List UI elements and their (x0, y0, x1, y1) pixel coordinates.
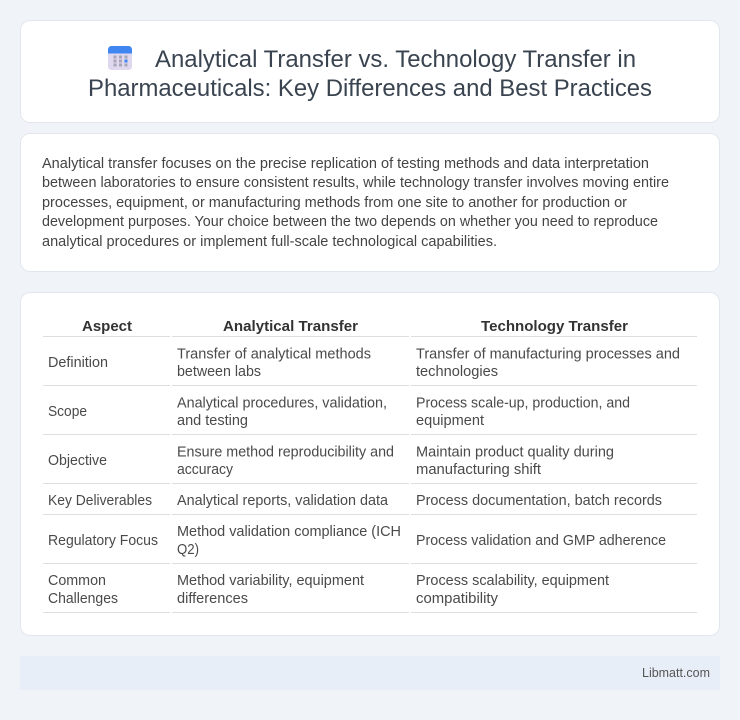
row: scope: Analytical procedures, validation, (177, 396, 387, 412)
row: common challenges: Process scalability, equipment (416, 573, 609, 589)
title: Pharmaceuticals: Key Differences and Best Practices (88, 75, 652, 102)
row: regulatory focus: Regulatory Focus (48, 533, 158, 549)
row: key deliverables (48, 493, 662, 509)
row: definition: Transfer of analytical methods (177, 346, 371, 362)
row: regulatory focus: Q2) (177, 542, 199, 558)
row: key deliverables: Key Deliverables (48, 493, 152, 509)
table header (82, 319, 628, 335)
intro text: analytical procedures or implement full-scale technological capabilities. (42, 234, 497, 250)
row: common challenges: Common (48, 573, 106, 589)
row: scope (48, 396, 630, 429)
row: key deliverables: Process documentation, batch records (416, 493, 662, 509)
title: Analytical Transfer vs. Technology Transfer in (155, 46, 636, 73)
row: regulatory focus (48, 524, 666, 558)
row: scope: equipment (416, 413, 484, 429)
comparison table (43, 319, 697, 612)
row: common challenges (48, 573, 609, 607)
table header: Technology Transfer (481, 319, 628, 335)
footer text: Libmatt.com (642, 666, 710, 680)
intro text: between laboratories to ensure consistent results, while technology transfer involves moving entire (42, 175, 669, 191)
row: regulatory focus: Method validation compliance (ICH (177, 524, 401, 540)
table header: Aspect (82, 319, 132, 335)
footer bar (20, 656, 720, 690)
intro panel (20, 133, 720, 272)
row: objective: Maintain product quality during (416, 444, 614, 460)
row: objective: accuracy (177, 462, 234, 478)
row: scope: and testing (177, 413, 248, 429)
title (88, 46, 652, 102)
intro text: Analytical transfer focuses on the precise replication of testing methods and data interpretation (42, 156, 649, 172)
row: definition: technologies (416, 364, 498, 380)
row: objective: Ensure method reproducibility and (177, 444, 394, 460)
row: definition (48, 346, 680, 380)
row: common challenges: differences (177, 591, 248, 607)
intro text: processes, equipment, or manufacturing methods from one site to another for production or (42, 195, 627, 211)
row: definition: between labs (177, 364, 261, 380)
row: scope: Process scale-up, production, and (416, 396, 630, 412)
intro text (42, 156, 669, 250)
row: common challenges: compatibility (416, 591, 499, 607)
row: objective (48, 444, 614, 478)
row: regulatory focus: Process validation and GMP adherence (416, 533, 666, 549)
intro text: development purposes. Your choice between the two depends on whether you need to reproduce (42, 214, 658, 230)
row: scope: Scope (48, 404, 87, 420)
table panel (20, 292, 720, 636)
row: definition: Transfer of manufacturing processes and (416, 346, 680, 362)
row: key deliverables: Analytical reports, validation data (177, 493, 388, 509)
table header: Analytical Transfer (223, 319, 358, 335)
row: common challenges: Method variability, equipment (177, 573, 364, 589)
row: common challenges: Challenges (48, 591, 118, 607)
row: definition: Definition (48, 355, 108, 371)
header panel (20, 20, 720, 123)
icon: calendar (108, 46, 132, 70)
row: objective: manufacturing shift (416, 462, 541, 478)
row: objective: Objective (48, 453, 107, 469)
